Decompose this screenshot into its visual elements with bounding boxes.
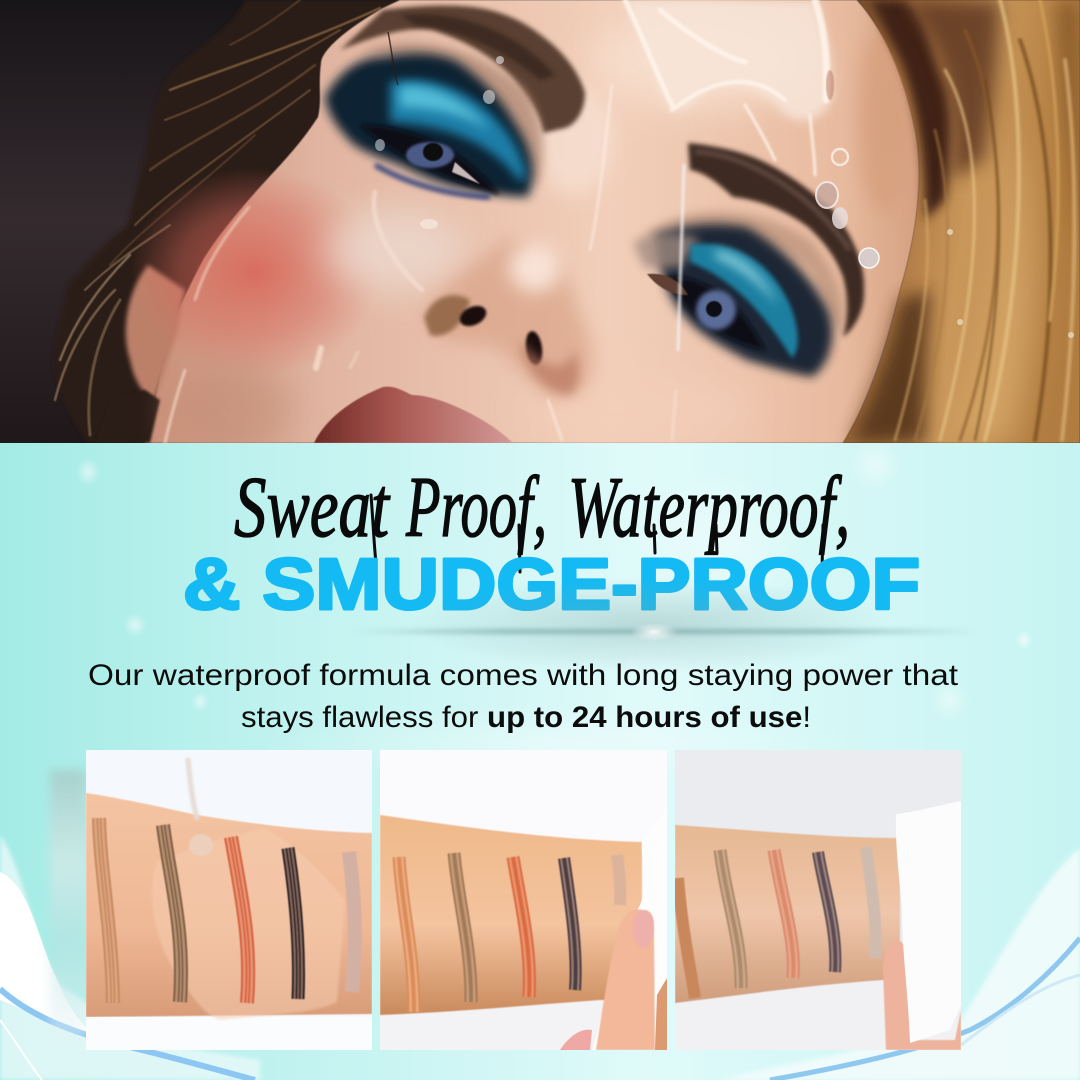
water drop [189,834,213,856]
title: Sweat Proof, Waterproof,: Sweat [234,458,391,555]
swatch 1 [399,857,414,1012]
left eyelid crease [360,43,543,190]
swatch 2 [163,825,181,1002]
right lower waves [720,848,1080,1080]
swatch 3 [774,850,793,978]
hair on the left [54,0,400,443]
body text [88,659,959,734]
swatch 1 [678,878,695,998]
panel: arm swatches with water [86,750,372,1050]
left eyebrow [340,5,585,133]
right eye with blue shadow [633,224,832,377]
left lower waves [0,835,260,1080]
swatch 2 [454,853,471,1002]
arm behind tissue [655,978,667,1050]
nose and nostrils [424,295,579,395]
swatch 3 [231,837,248,1003]
swatch 3 [513,857,529,997]
hair on the right [843,0,1080,443]
title: Sweat Proof, Waterproof, [234,458,850,572]
aqua background panel [0,439,1080,1080]
water splash on forehead and drops [165,0,1074,443]
body text: stays flawless for up to 24 hours of use ! [241,701,811,734]
swatch 1 [99,818,113,1003]
water stream [188,760,197,818]
swatch 4 [564,858,576,990]
right eyelid crease [640,212,844,335]
finger [596,909,655,1050]
panel: arm wiped clean, swatches remain [675,750,961,1050]
title: & SMUDGE-PROOF: & SMUDGE-PROOF [183,545,920,625]
title: Sweat Proof, Waterproof,: Waterproof, [568,458,850,555]
lips [314,387,513,443]
soft shadow behind photo strip [50,770,86,1040]
photo: woman's wet face with blue eyeshadow [0,0,1080,460]
right eyebrow [688,143,864,337]
water puddle [152,828,345,1020]
tissue [592,842,643,1050]
skin shading and blush [130,10,911,460]
swatch 5 [349,852,355,992]
second finger [560,1030,592,1050]
swatch 4 [818,852,835,972]
panel: arm wiped with tissue [380,750,667,1050]
ear [126,265,185,400]
left eye with blue shadow [325,32,532,197]
swatch 5 [866,847,876,958]
decorative glowing divider [350,577,980,673]
dark hair behind jaw [140,388,162,443]
title: Sweat Proof, Waterproof,: Proof, [405,458,547,555]
finger [883,940,961,1050]
tissue [896,801,961,1043]
face skin [145,0,919,443]
swatch 5 [617,855,620,905]
swatch 2 [720,850,741,988]
body text: Our waterproof formula comes with long staying power that [88,659,959,692]
fingernail [633,910,654,948]
swatch 4 [288,848,299,999]
